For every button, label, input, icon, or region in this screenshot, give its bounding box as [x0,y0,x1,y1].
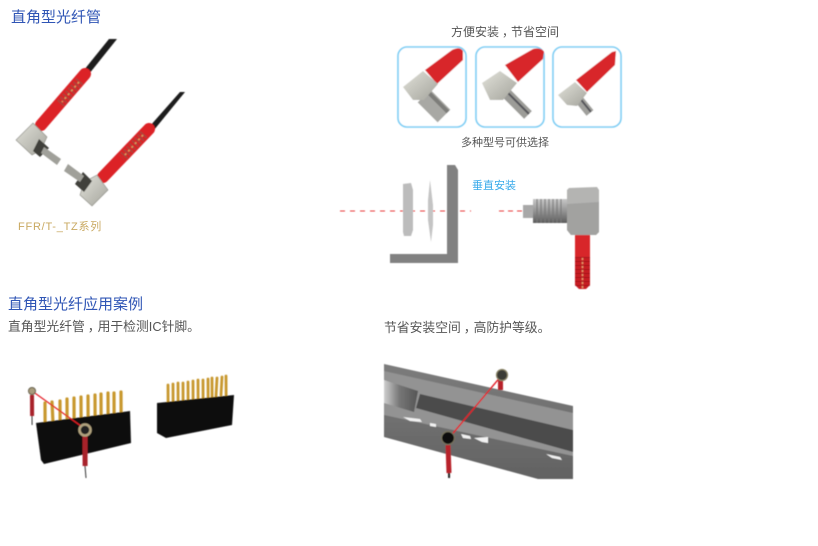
laser beam [340,210,524,212]
panel: model 2 [476,47,544,127]
top sensor [496,370,508,390]
small sensor [28,388,36,425]
fiber 2 [64,92,185,206]
product photo: pair of fibers [16,39,185,206]
left connector body [36,411,131,464]
product series label: FFR/T-_TZ系列 [18,219,102,233]
dark textured channel [416,394,573,452]
heading: application cases: 直角型光纤应用案例 [8,295,143,313]
text: space saving: 节省安装空间，高防护等级。 [384,320,550,335]
washer [428,180,433,242]
pins, left connector [45,392,121,424]
diagram: vertical mounting [340,165,599,289]
beam [32,391,81,426]
pins, right connector [168,376,226,404]
beam [449,375,502,438]
caption: easy installation: 方便安装，节省空间 [451,24,559,39]
panel: model 1 [398,47,466,127]
caption: multiple models: 多种型号可供选择 [461,135,549,149]
label: vertical mounting: 垂直安装 [472,178,516,192]
rail inner surface [384,371,573,456]
panel: model 3 [553,47,621,127]
sensor [523,187,599,289]
large sensor [80,424,90,478]
right connector body [157,395,234,438]
fiber 1 [16,39,117,165]
nut [403,183,413,236]
L bracket [390,165,458,263]
illustration: IC pin detection [28,376,234,478]
illustration: rail detection [384,364,573,479]
heading: right-angle fiber: 直角型光纤管 [11,9,101,26]
bottom sensor [442,432,454,478]
rail body [384,364,573,479]
textured left patch [384,380,418,412]
highlights [403,417,562,460]
text: IC pin detection: 直角型光纤管，用于检测IC针脚。 [8,319,200,334]
